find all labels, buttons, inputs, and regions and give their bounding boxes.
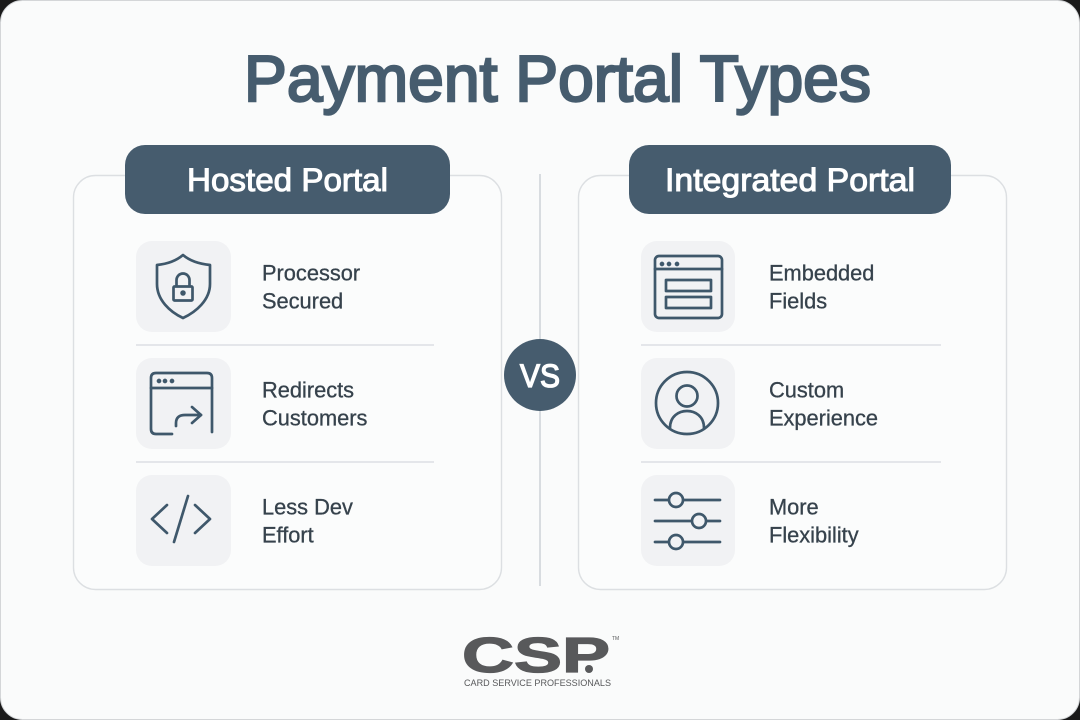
logo: CSP: CARD SERVICE PROFESSIONALS <box>464 678 611 688</box>
panel outline: hosted <box>74 176 502 590</box>
label: Experience <box>769 406 878 430</box>
label: Processor <box>262 260 360 286</box>
VS badge <box>504 339 576 411</box>
item: processor secured <box>136 241 360 332</box>
label: Embedded <box>769 260 874 286</box>
label: Less Dev <box>262 494 353 520</box>
item: embedded fields <box>641 241 874 332</box>
heading: hosted portal: Hosted Portal <box>187 162 388 198</box>
item: more flexibility <box>641 475 859 566</box>
label: More <box>769 494 819 520</box>
panel: hosted portal <box>74 145 502 590</box>
logo: CSP: CSP <box>462 629 610 683</box>
label: Secured <box>262 288 343 314</box>
panel outline: integrated <box>578 176 1006 590</box>
label: Fields <box>769 288 827 314</box>
label: Flexibility <box>769 522 859 548</box>
icon: code brackets <box>152 496 210 542</box>
label: Effort <box>262 522 314 548</box>
item: custom experience <box>641 358 878 449</box>
icon: form window <box>655 256 722 318</box>
icon: sliders <box>655 493 720 549</box>
title: Payment Portal Types <box>244 42 871 115</box>
icon: browser window with arrow <box>151 373 212 434</box>
heading: integrated portal <box>629 145 951 214</box>
heading: integrated portal: Integrated Portal <box>665 162 915 198</box>
panel: integrated portal <box>578 145 1006 590</box>
logo: CSP: TM <box>612 636 619 642</box>
label: Customers <box>262 406 367 430</box>
label: Redirects <box>262 378 354 402</box>
heading: hosted portal <box>125 145 450 214</box>
icon: user circle <box>656 372 718 434</box>
VS badge: VS <box>520 358 560 394</box>
label: Custom <box>769 378 844 402</box>
item: less dev effort <box>136 475 353 566</box>
center divider <box>539 174 541 586</box>
icon: shield with lock <box>157 255 210 318</box>
item: redirects customers <box>136 358 367 449</box>
logo: CSP <box>462 629 619 688</box>
